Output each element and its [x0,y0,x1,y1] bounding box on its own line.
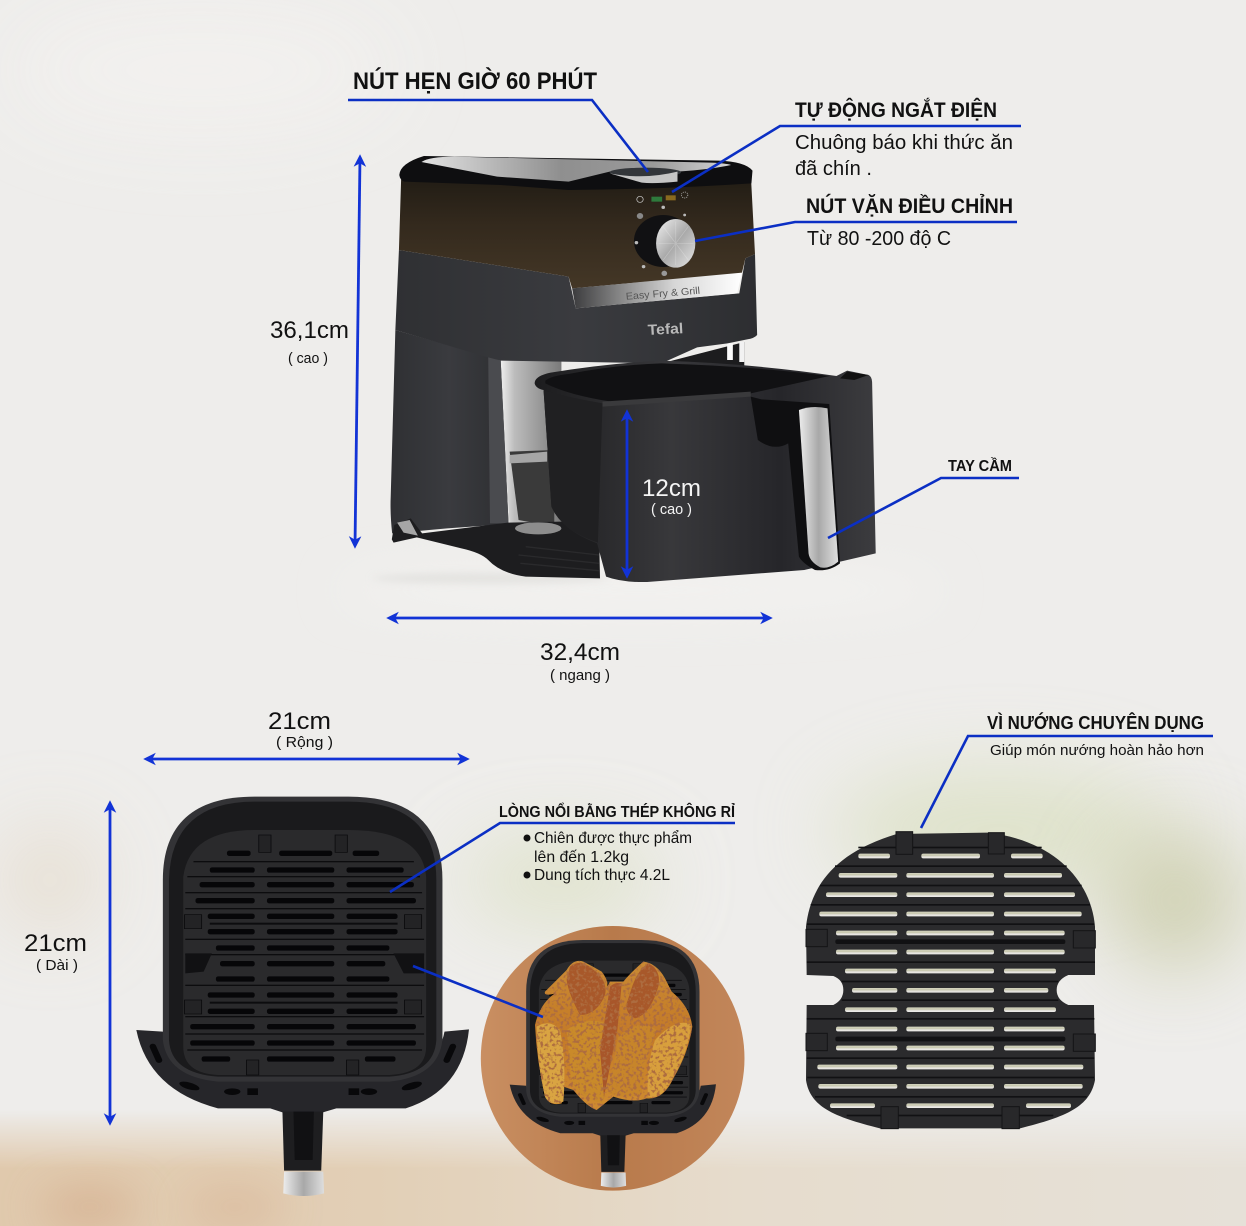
rack slots [817,854,1083,1108]
arrow: basket length 21cm [109,803,111,1123]
label: basket length [24,930,87,974]
leader: inner pot [390,823,735,892]
label: basket width: ( Rộng ) [276,734,333,751]
leader: auto shutoff [672,126,1021,192]
fryer shadow [372,573,608,584]
rack outline [806,833,1095,1128]
heading: knob: NÚT VẶN ĐIỀU CHỈNH [806,194,1013,218]
basket flange [136,1029,469,1113]
leader: grill rack [921,736,1213,828]
background [0,744,1246,1226]
label: basket height: ( cao ) [651,501,692,518]
fryer mid band [395,250,757,363]
temperature knob [634,215,695,268]
leader: basket to chicken [413,966,543,1017]
fryer name strip: Easy Fry & Grill [625,286,701,303]
label: basket length: ( Dài ) [36,957,78,974]
label: basket length: 21cm [24,930,87,957]
roast chicken [535,961,692,1110]
dimension arrows [110,157,770,1123]
heading: timer: NÚT HẸN GIỜ 60 PHÚT [353,67,597,95]
leader lines [348,100,1213,1017]
fryer cavity [499,359,561,528]
text: inner pot bullets [524,829,692,884]
handle metal cap [283,1172,324,1196]
label: height: ( cao ) [288,350,328,367]
heading: inner pot: LÒNG NỔI BẰNG THÉP KHÔNG RỈ [499,802,735,821]
fryer control panel [399,169,755,288]
basket handle [282,1112,323,1171]
top view basket [136,797,469,1196]
label: basket width [268,708,333,751]
wooden board with small basket [481,926,744,1191]
arrow: width 32.4cm [389,617,770,619]
fryer base [392,518,600,578]
basket grill floor [183,830,426,1075]
leader: knob [695,222,1017,241]
fryer lower body [391,330,509,533]
label: height [270,317,349,367]
text: inner pot bullets: Chiên được thực phẩm [534,829,692,847]
rack clips [806,832,1095,1129]
text: inner pot bullets: lên đến 1.2kg [534,849,629,866]
heading: handle: TAY CẦM [948,456,1012,475]
panel indicators [635,192,688,276]
grill ridges [185,861,424,1051]
fryer name strip [572,273,742,308]
label: width: ( ngang ) [550,667,610,684]
label: width: 32,4cm [540,639,620,666]
leader: timer [348,100,648,172]
text: grill rack description: Giúp món nướng hoàn hảo hơn [990,742,1204,759]
rack ridges [807,847,1095,1116]
grill tabs [184,835,422,1075]
label: basket height: 12cm [642,475,701,502]
small basket [510,940,716,1188]
grill slots [190,851,416,1062]
arrow: height 36.1cm [355,157,360,546]
arrow: basket width 21cm [146,758,467,760]
grill notches [185,953,424,973]
brand logo: Tefal [647,321,684,339]
leader: handle [828,478,1019,538]
arrow: basket height 12cm [626,412,628,576]
text: auto shutoff description: Chuông báo khi thức ăn [795,131,1013,154]
label: basket width: 21cm [268,708,331,735]
heading: grill rack: VÌ NƯỚNG CHUYÊN DỤNG [987,712,1204,733]
text: knob range: Từ 80 -200 độ C [807,228,951,250]
label: basket height [642,475,701,518]
text: inner pot bullets: Dung tích thực 4.2L [534,867,670,884]
grill rack [806,832,1095,1129]
wood board [481,926,744,1191]
pull-out basket [535,361,876,582]
label: width [540,639,620,684]
label: height: 36,1cm [270,317,349,344]
fryer lid [399,156,752,190]
heading: auto shutoff: TỰ ĐỘNG NGẮT ĐIỆN [795,98,997,122]
air fryer product [372,156,876,584]
flange slots [149,1043,457,1095]
basket outer wall [163,797,442,1082]
text: auto shutoff description: đã chín . [795,157,872,180]
fryer rear window [661,342,744,383]
